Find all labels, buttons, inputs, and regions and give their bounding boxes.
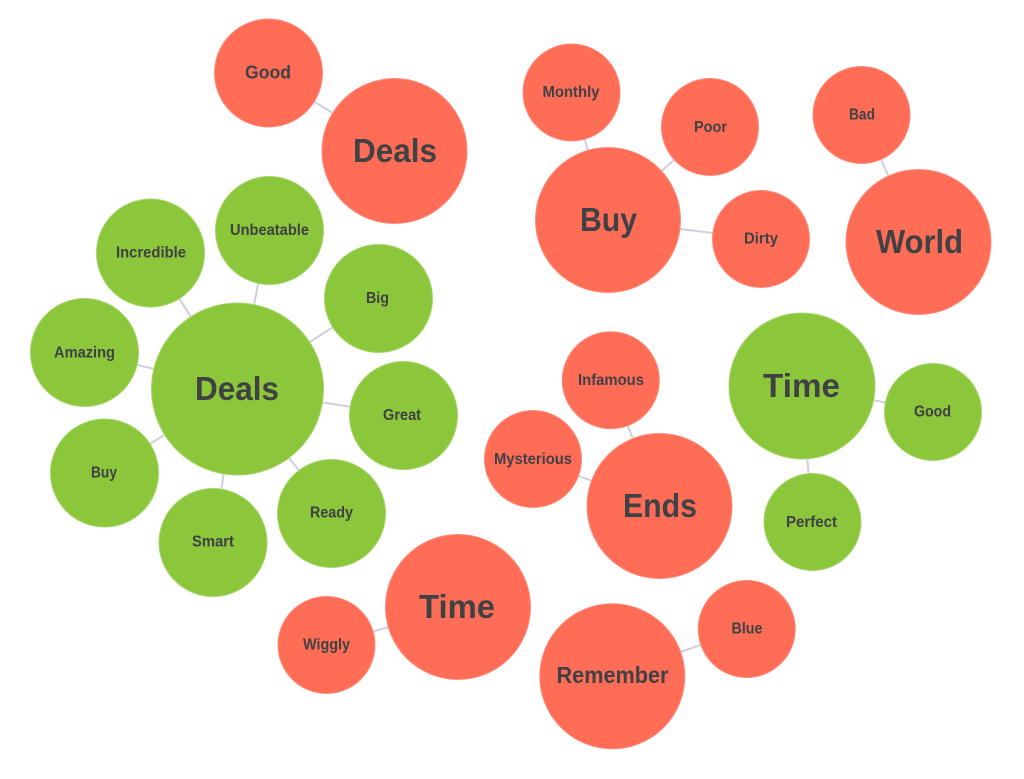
bubble: Buy (green): Buy bbox=[91, 464, 117, 482]
bubble: Buy (red) bbox=[536, 148, 680, 292]
bubble: Good (green) bbox=[884, 364, 982, 460]
bubble: Time (red): Time bbox=[419, 588, 495, 625]
bubble: Amazing bbox=[30, 298, 138, 406]
bubble: Great: Great bbox=[383, 407, 422, 424]
bubble: Time (red) bbox=[386, 534, 530, 680]
bubble: Mysterious bbox=[484, 410, 582, 508]
bubble: Blue: Blue bbox=[732, 620, 763, 638]
bubble: Infamous: Infamous bbox=[578, 372, 644, 389]
bubble: Infamous bbox=[562, 332, 659, 429]
bubble: Poor: Poor bbox=[694, 119, 727, 136]
bubble: Poor bbox=[662, 78, 758, 176]
bubble: Ends bbox=[587, 434, 732, 578]
bubble: Deals (green): Deals bbox=[195, 370, 279, 407]
bubble: Big bbox=[324, 244, 432, 352]
bubble: Amazing: Amazing bbox=[54, 344, 115, 362]
bubble: Time (green): Time bbox=[763, 367, 840, 404]
bubble: Good bbox=[214, 19, 322, 127]
bubble: Mysterious: Mysterious bbox=[494, 451, 572, 468]
bubble: Good (green): Good bbox=[914, 404, 951, 420]
bubble: Monthly: Monthly bbox=[542, 84, 600, 101]
bubble: Dirty: Dirty bbox=[744, 230, 778, 248]
bubble: Perfect: Perfect bbox=[786, 514, 838, 531]
bubble: Bad: Bad bbox=[849, 106, 875, 124]
bubble: Blue bbox=[698, 580, 795, 678]
bubble: Wiggly bbox=[278, 596, 375, 694]
bubble: Unbeatable: Unbeatable bbox=[230, 222, 309, 239]
bubble: Good: Good bbox=[245, 62, 291, 82]
bubble: Unbeatable bbox=[216, 176, 324, 284]
bubble: Smart: Smart bbox=[192, 534, 235, 550]
bubble: Incredible: Incredible bbox=[116, 244, 186, 262]
bubble: Deals (green) bbox=[152, 303, 324, 475]
bubble: Smart bbox=[159, 488, 267, 596]
bubble: Monthly bbox=[523, 44, 620, 141]
bubble: Deals (red): Deals bbox=[353, 132, 437, 169]
bubble: Dirty bbox=[712, 190, 810, 288]
bubble: World: World bbox=[876, 223, 963, 260]
bubble: Big: Big bbox=[366, 290, 389, 307]
bubble: Buy (green) bbox=[50, 419, 158, 527]
bubble: Time (green) bbox=[729, 313, 875, 459]
bubble: Great bbox=[350, 362, 458, 470]
bubble: Ready: Ready bbox=[310, 504, 353, 522]
bubble: Perfect bbox=[764, 474, 861, 570]
bubble: Bad bbox=[813, 66, 910, 164]
bubble: Remember bbox=[540, 604, 685, 749]
bubble: Buy (red): Buy bbox=[580, 201, 638, 238]
bubble: Ends: Ends bbox=[623, 487, 697, 524]
bubble: Deals (red) bbox=[322, 78, 467, 224]
bubble: Incredible bbox=[96, 199, 204, 307]
bubble: Wiggly: Wiggly bbox=[303, 636, 350, 654]
bubble: World bbox=[846, 170, 991, 314]
bubble: Ready bbox=[278, 460, 386, 568]
bubble: Remember: Remember bbox=[556, 662, 668, 688]
